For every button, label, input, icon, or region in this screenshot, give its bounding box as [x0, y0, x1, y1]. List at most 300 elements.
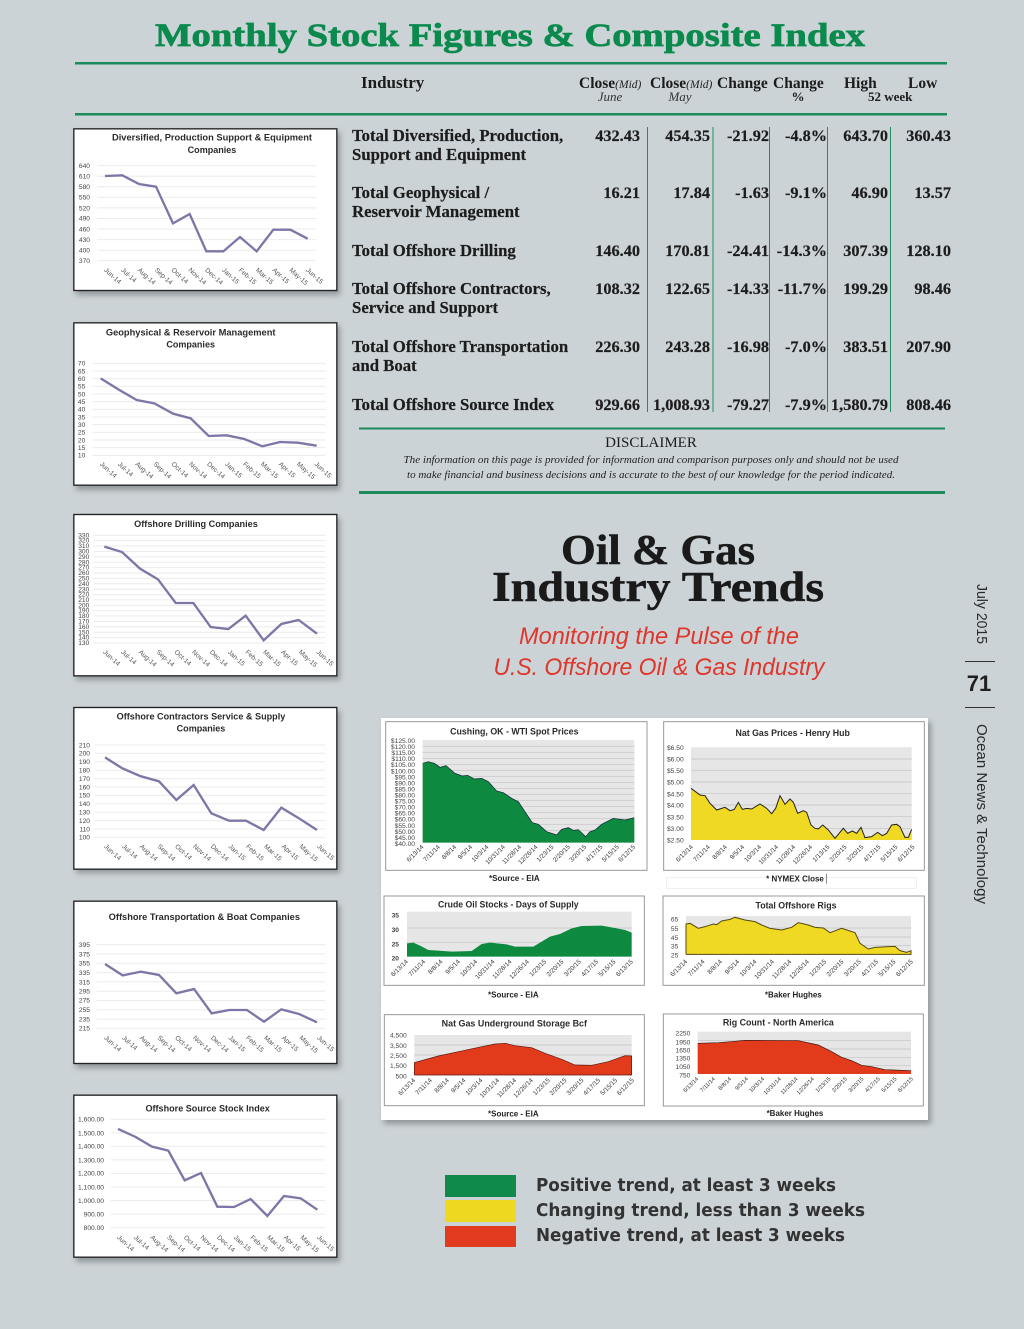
line chart: transportation and boat: 275	[79, 998, 90, 1005]
line chart: source stock index: Sep-14	[165, 1234, 186, 1254]
line chart: diversified: May-15	[288, 267, 309, 287]
line chart: offshore contractors	[74, 707, 337, 869]
line chart: diversified: 490	[79, 216, 90, 223]
line chart: offshore contractors: Companies	[177, 724, 225, 734]
area chart: WTI spot prices: 6/13/14	[406, 843, 426, 864]
line chart: offshore drilling: 190	[78, 608, 90, 615]
area chart: total offshore rigs: Total Offshore Rigs	[755, 900, 836, 910]
area chart: crude oil stocks: 7/11/14	[408, 958, 427, 978]
row: source index: 808.46	[906, 395, 951, 414]
area chart: WTI spot prices: $85.00	[395, 786, 415, 793]
area chart: WTI spot prices: $115.00	[391, 750, 415, 757]
area chart: WTI spot prices: 7/11/14	[422, 843, 442, 863]
row: offshore contractors	[352, 279, 951, 317]
subheading: U.S. Offshore Oil & Gas Industry	[494, 654, 826, 681]
area chart: total offshore rigs: 6/13/14	[669, 958, 689, 978]
area chart: Henry Hub gas prices: $5.00	[667, 780, 684, 787]
area chart: WTI spot prices: 9/5/14	[457, 843, 474, 861]
area chart: rig count: 8/8/14	[718, 1077, 733, 1092]
line chart: diversified: Companies	[188, 145, 236, 155]
area chart: total offshore rigs: 2/20/15	[826, 958, 846, 978]
line chart: source stock index: Nov-14	[199, 1234, 220, 1254]
line chart: offshore drilling: May-15	[297, 649, 318, 669]
area chart: rig count: 7/11/14	[699, 1077, 717, 1094]
line chart: offshore drilling: 250	[78, 575, 90, 582]
area chart: gas storage: 10/3/14	[465, 1077, 485, 1097]
line chart: geophysical	[74, 323, 337, 485]
legend item: positive trend	[445, 1175, 836, 1197]
line chart: geophysical: Sep-14	[152, 461, 173, 481]
area chart: Henry Hub gas prices: 10/3/14	[743, 843, 763, 864]
line chart: diversified: Nov-14	[187, 267, 208, 287]
line chart: offshore drilling: Sep-14	[155, 649, 176, 669]
line chart: geophysical: Companies	[166, 340, 215, 350]
line chart: offshore drilling: Offshore Drilling Companies	[134, 519, 258, 529]
line chart: geophysical: 50	[78, 391, 86, 398]
line chart: offshore contractors: 170	[79, 776, 90, 783]
line chart: diversified: 400	[79, 248, 90, 255]
table header: Close(Mid)	[579, 75, 642, 92]
row: diversified: 432.43	[595, 126, 640, 145]
line chart: diversified: 580	[79, 184, 90, 191]
line chart: transportation and boat: Apr-15	[280, 1035, 300, 1053]
area chart: WTI spot prices: $60.00	[395, 817, 415, 824]
area chart: WTI spot prices: $105.00	[391, 762, 415, 769]
area chart: crude oil stocks: 2/20/15	[546, 958, 566, 978]
line chart: offshore contractors: Dec-14	[209, 843, 230, 863]
line chart: offshore drilling: Jan-15	[226, 649, 246, 668]
line chart: offshore drilling: 220	[78, 592, 90, 599]
area chart: WTI spot prices: 1/23/15	[536, 843, 556, 864]
line chart: diversified: 520	[79, 205, 90, 212]
area chart: Henry Hub gas prices: 11/28/14	[775, 843, 797, 866]
line chart: offshore drilling: 260	[78, 570, 90, 577]
line chart: offshore contractors: Jul-14	[120, 843, 139, 861]
row: diversified: 454.35	[665, 126, 710, 145]
line chart: transportation and boat: Offshore Transportation & Boat Companies	[109, 912, 300, 922]
table header: Industry	[361, 73, 425, 92]
row: offshore contractors: 98.46	[914, 279, 951, 298]
line chart: diversified: Diversified, Production Support & Equipment	[112, 133, 312, 143]
sidebar: issue and page number: Ocean News & Technology	[973, 724, 989, 905]
row: offshore contractors: -11.7%	[778, 279, 827, 298]
line chart: source stock index: Offshore Source Stock Index	[145, 1104, 270, 1114]
line chart: geophysical: May-15	[295, 461, 316, 481]
subheading: Monitoring the Pulse of the	[519, 623, 799, 650]
line chart: transportation and boat: 215	[79, 1026, 90, 1033]
area chart: crude oil stocks: 30	[392, 927, 399, 934]
area chart: WTI spot prices: 8/8/14	[441, 843, 458, 861]
area chart: Henry Hub gas prices: $2.50	[667, 837, 684, 844]
line chart: diversified: 550	[79, 195, 90, 202]
line chart: offshore drilling: 320	[78, 538, 90, 545]
line chart: diversified: Jun-15	[304, 267, 324, 286]
area chart: WTI spot prices: 2/20/15	[552, 843, 572, 864]
area chart: Henry Hub gas prices: 10/31/14	[758, 843, 780, 866]
area chart: rig count: 1350	[676, 1055, 691, 1062]
line chart: geophysical: Jun-15	[313, 461, 333, 480]
line chart: transportation and boat: Sep-14	[156, 1035, 177, 1054]
line chart: offshore drilling: 160	[78, 624, 90, 631]
line chart: geophysical: Jun-14	[98, 461, 118, 480]
area chart: crude oil stocks: *Source - EIA	[488, 990, 539, 999]
area chart: rig count: 11/28/14	[780, 1077, 799, 1096]
line chart: geophysical: Oct-14	[170, 461, 189, 480]
area chart: total offshore rigs: 10/31/14	[753, 958, 776, 981]
area chart: gas storage: 3,500	[390, 1043, 407, 1050]
area chart: gas storage: 1/23/15	[532, 1077, 552, 1097]
line chart: offshore contractors: 200	[79, 751, 90, 758]
line chart: offshore contractors: Jun-14	[102, 843, 122, 862]
row: offshore drilling	[352, 241, 951, 260]
line chart: diversified: Oct-14	[170, 267, 189, 286]
area chart: rig count: 10/31/14	[763, 1077, 783, 1096]
disclaimer: DISCLAIMER	[605, 435, 697, 451]
line chart: transportation and boat: 315	[79, 979, 90, 986]
area chart: Henry Hub gas prices: 7/11/14	[692, 843, 712, 863]
line chart: offshore contractors: 120	[79, 818, 90, 825]
shadows behind line chart cards	[76, 132, 931, 1262]
row: offshore drilling: -24.41	[727, 241, 769, 260]
line chart: offshore contractors: Mar-15	[262, 843, 283, 863]
sidebar: issue and page number: 71	[967, 671, 991, 696]
line chart: source stock index: Feb-15	[249, 1234, 269, 1254]
area chart: crude oil stocks: 4/17/15	[580, 958, 600, 978]
area chart: gas storage: 8/8/14	[433, 1077, 451, 1095]
area chart: WTI spot prices: $70.00	[395, 805, 415, 812]
area chart: crude oil stocks: 6/13/14	[390, 958, 410, 978]
line chart: source stock index: 1,500.00	[78, 1130, 104, 1137]
row: offshore drilling: Total Offshore Drilling	[352, 241, 516, 260]
area chart: gas storage: 4,500	[390, 1033, 407, 1040]
table header: June	[598, 89, 622, 104]
line chart: diversified: Feb-15	[237, 267, 258, 286]
area chart: Henry Hub gas prices: $6.00	[667, 757, 684, 764]
area chart: total offshore rigs: 65	[671, 917, 679, 924]
area chart: Henry Hub gas prices: 9/5/14	[729, 843, 746, 861]
line chart: geophysical: 30	[78, 422, 86, 429]
area chart: crude oil stocks: 9/5/14	[444, 958, 462, 976]
row: offshore contractors: 199.29	[843, 279, 888, 298]
area chart: Henry Hub gas prices: 6/13/14	[675, 843, 695, 864]
area chart: crude oil stocks: 1/23/15	[528, 958, 548, 978]
area chart: WTI spot prices: $100.00	[391, 768, 415, 775]
area chart: WTI spot prices: 11/28/14	[501, 843, 523, 866]
line chart: offshore contractors: Aug-14	[138, 843, 159, 863]
area chart: WTI spot prices: 6/12/15	[617, 843, 637, 864]
area chart: rig count	[663, 1014, 923, 1118]
row: offshore contractors: Total Offshore Contractors,	[352, 279, 551, 298]
line chart: transportation and boat: Jun-15	[315, 1035, 335, 1054]
area chart: total offshore rigs: 11/28/14	[771, 958, 793, 981]
area chart: crude oil stocks: 12/26/14	[508, 958, 531, 981]
line chart: transportation and boat: 235	[79, 1016, 90, 1023]
title: Monthly Stock Figures & Composite Index	[155, 18, 866, 54]
line chart: diversified: Dec-14	[203, 267, 224, 287]
area chart: WTI spot prices: $75.00	[395, 799, 415, 806]
line chart: geophysical: 10	[78, 453, 86, 460]
row: offshore contractors: -14.33	[727, 279, 769, 298]
row: geophysical: Reservoir Management	[352, 202, 520, 221]
area chart: WTI spot prices: $40.00	[395, 841, 415, 848]
line chart: geophysical: 65	[78, 368, 86, 375]
line chart: source stock index: 1,300.00	[78, 1157, 104, 1164]
area chart: total offshore rigs: 4/17/15	[860, 958, 880, 978]
row: source index: -7.9%	[785, 395, 827, 414]
line chart: offshore drilling: Oct-14	[173, 649, 192, 668]
area chart: Henry Hub gas prices	[664, 722, 924, 888]
line chart: offshore drilling: 300	[78, 549, 90, 556]
area chart: rig count: 2/20/15	[831, 1077, 849, 1094]
row: geophysical: 17.84	[673, 183, 710, 202]
line chart: offshore contractors: 100	[79, 835, 90, 842]
line chart: source stock index: 900.00	[84, 1211, 104, 1218]
row: source index: -79.27	[727, 395, 769, 414]
area chart: crude oil stocks: 6/13/15	[615, 958, 635, 978]
area chart: Henry Hub gas prices: 12/26/14	[792, 843, 814, 866]
area chart: total offshore rigs: 6/12/15	[895, 958, 915, 978]
area chart: gas storage: 2/20/15	[549, 1077, 569, 1097]
line chart: geophysical: 25	[78, 430, 86, 437]
area chart: rig count: 1050	[676, 1064, 691, 1071]
line chart: offshore contractors: Apr-15	[280, 843, 300, 862]
line chart: source stock index: Jul-14	[132, 1234, 150, 1252]
line chart: diversified: 640	[79, 163, 90, 170]
line chart: offshore contractors: Feb-15	[244, 843, 265, 863]
line chart: geophysical: 70	[78, 361, 86, 368]
table header	[361, 73, 938, 104]
table header: Change	[717, 75, 768, 92]
area chart: WTI spot prices: $110.00	[391, 756, 415, 763]
line chart: transportation and boat: Oct-14	[173, 1035, 193, 1053]
table header: May	[667, 89, 692, 104]
area chart: total offshore rigs: 35	[671, 943, 679, 950]
heading: oil and gas industry trends	[492, 528, 824, 611]
line chart: offshore contractors: 180	[79, 768, 90, 775]
area chart: WTI spot prices: 4/17/15	[585, 843, 605, 864]
area chart: rig count: 10/3/14	[748, 1077, 766, 1094]
table header: 52 week	[868, 89, 913, 104]
row: transportation and boat	[352, 337, 951, 375]
line chart: offshore contractors: Sep-14	[156, 843, 177, 863]
row: geophysical: 13.57	[914, 183, 951, 202]
line chart: offshore drilling	[74, 514, 337, 676]
area chart: gas storage	[384, 1015, 644, 1119]
line chart: diversified: Jul-14	[119, 267, 138, 284]
legend item: positive trend: Positive trend, at least 3 weeks	[536, 1176, 836, 1196]
area chart: Henry Hub gas prices: 1/13/15	[812, 843, 832, 864]
line chart: offshore drilling: Nov-14	[190, 649, 211, 669]
line chart: geophysical: Feb-15	[241, 461, 262, 480]
row: diversified: Total Diversified, Production,	[352, 126, 563, 145]
subheading	[494, 623, 826, 681]
line chart: source stock index: Dec-14	[215, 1234, 236, 1254]
area chart: WTI spot prices: $120.00	[391, 744, 415, 751]
area chart: gas storage: 10/31/14	[479, 1077, 501, 1100]
line chart: geophysical: 20	[78, 437, 86, 444]
line chart: diversified: 370	[79, 258, 90, 265]
area chart: WTI spot prices: $90.00	[395, 780, 415, 787]
heading: oil and gas industry trends: Industry Trends	[492, 565, 824, 611]
row: offshore contractors: 122.65	[665, 279, 710, 298]
line chart: source stock index: Apr-15	[282, 1234, 302, 1253]
line chart: source stock index: Jun-15	[315, 1234, 335, 1253]
line chart: offshore contractors: Jun-15	[315, 843, 335, 862]
row: source index	[352, 395, 951, 414]
line chart: source stock index: 1,400.00	[78, 1144, 104, 1151]
line chart: geophysical: Jul-14	[116, 461, 134, 478]
area chart: Henry Hub gas prices: Nat Gas Prices - Henry Hub	[735, 728, 850, 738]
area chart: WTI spot prices: 12/26/14	[517, 843, 540, 866]
table: monthly stock figures	[352, 126, 951, 414]
line chart: offshore contractors: 150	[79, 793, 90, 800]
legend	[445, 1175, 865, 1247]
row: diversified: -21.92	[727, 126, 769, 145]
area chart: WTI spot prices: $125.00	[391, 738, 415, 745]
row: diversified	[352, 126, 951, 164]
line chart: transportation and boat: May-15	[298, 1035, 319, 1055]
line chart: transportation and boat: Jul-14	[120, 1035, 139, 1052]
area chart: rig count: 1650	[676, 1048, 691, 1055]
row: transportation and boat: 226.30	[595, 337, 640, 356]
area chart: rig count: 3/20/15	[848, 1077, 865, 1094]
table header: %	[792, 89, 804, 104]
legend item: changing trend: Changing trend, less than 3 weeks	[536, 1201, 865, 1221]
line chart: transportation and boat: 375	[79, 951, 90, 958]
line chart: offshore contractors: Nov-14	[191, 843, 212, 863]
line chart: geophysical: 40	[78, 407, 86, 414]
area chart: crude oil stocks: Crude Oil Stocks - Days of Supply	[438, 900, 579, 910]
line chart: transportation and boat: Nov-14	[191, 1035, 212, 1054]
line chart: offshore drilling: 290	[78, 554, 90, 561]
line chart: transportation and boat: 335	[79, 970, 90, 977]
heading: oil and gas industry trends: Oil & Gas	[561, 528, 755, 574]
line chart: offshore contractors: Oct-14	[173, 843, 193, 862]
row: diversified: -4.8%	[785, 126, 827, 145]
panel: industry trend charts	[381, 718, 928, 1120]
line chart: offshore contractors: Offshore Contractors Service & Supply	[117, 711, 285, 721]
area chart: total offshore rigs: 1/23/15	[808, 958, 828, 978]
line chart: diversified: 610	[79, 174, 90, 181]
disclaimer	[404, 435, 899, 481]
area chart: Henry Hub gas prices: $6.50	[667, 745, 684, 752]
line chart: offshore drilling: Aug-14	[137, 649, 158, 669]
line chart: geophysical: Aug-14	[134, 461, 155, 481]
area chart: rig count: 9/5/14	[734, 1077, 750, 1092]
row: geophysical	[352, 183, 951, 221]
line chart: diversified: 460	[79, 226, 90, 233]
line chart: offshore contractors: Jan-15	[227, 843, 247, 862]
line chart: geophysical: Geophysical & Reservoir Management	[106, 327, 275, 337]
area chart: rig count: 6/13/14	[682, 1077, 700, 1094]
line chart: source stock index: Oct-14	[182, 1234, 202, 1253]
area chart: gas storage: 12/26/14	[512, 1077, 535, 1100]
row: source index: 1,580.79	[831, 395, 888, 414]
area chart: WTI spot prices: $55.00	[395, 823, 415, 830]
line chart: offshore contractors: 140	[79, 801, 90, 808]
area chart: crude oil stocks	[384, 896, 644, 999]
line chart: offshore contractors: 110	[79, 826, 90, 833]
line chart: transportation and boat: 255	[79, 1007, 90, 1014]
legend item: negative trend: Negative trend, at least 3 weeks	[536, 1226, 845, 1246]
area chart: WTI spot prices: Cushing, OK - WTI Spot Prices	[450, 726, 578, 736]
area chart: crude oil stocks: 10/3/14	[459, 958, 479, 978]
line chart: diversified: Jun-14	[102, 267, 122, 286]
line chart: transportation and boat: Feb-15	[244, 1035, 265, 1054]
area chart: gas storage: 7/11/14	[414, 1077, 434, 1097]
line chart: source stock index: 1,100.00	[78, 1184, 104, 1191]
row: transportation and boat: and Boat	[352, 356, 417, 375]
row: offshore drilling: 307.39	[843, 241, 888, 260]
line chart: geophysical: Jan-15	[223, 461, 243, 480]
area chart: Henry Hub gas prices: 2/20/15	[829, 843, 849, 864]
area chart: Henry Hub gas prices: 5/15/15	[880, 843, 900, 864]
line chart: source stock index	[74, 1095, 337, 1257]
row: geophysical: Total Geophysical /	[352, 183, 489, 202]
row: offshore contractors: 108.32	[595, 279, 640, 298]
disclaimer: to make financial and business decisions and is accurate to the best of our knowledge for the period indicated.	[407, 469, 895, 481]
line chart: source stock index: 800.00	[84, 1225, 104, 1232]
area chart: Henry Hub gas prices: 3/20/15	[846, 843, 866, 864]
area chart: WTI spot prices: *Source - EIA	[489, 874, 540, 883]
area chart: rig count: 5/15/15	[881, 1077, 898, 1094]
line chart: diversified: 430	[79, 237, 90, 244]
area chart: total offshore rigs: 8/8/14	[706, 958, 724, 976]
line chart: offshore drilling: Jun-15	[315, 649, 335, 668]
area chart: crude oil stocks: 35	[392, 913, 399, 920]
area chart: crude oil stocks: 25	[392, 941, 399, 948]
area chart: gas storage: 6/12/15	[616, 1077, 636, 1097]
row: transportation and boat: Total Offshore Transportation	[352, 337, 569, 356]
area chart: Henry Hub gas prices: $3.50	[667, 814, 684, 821]
line chart: offshore drilling: 270	[78, 565, 90, 572]
area chart: Henry Hub gas prices: * NYMEX Close	[766, 875, 824, 884]
row: transportation and boat: 383.51	[843, 337, 888, 356]
line chart: offshore drilling: 140	[78, 635, 90, 642]
sidebar: issue and page number: July 2015	[973, 584, 989, 644]
area chart: WTI spot prices: $80.00	[395, 793, 415, 800]
area chart: rig count: Rig Count - North America	[723, 1017, 835, 1027]
area chart: rig count: 4/17/15	[864, 1077, 882, 1094]
line chart: transportation and boat: 395	[79, 942, 90, 949]
area chart: Henry Hub gas prices: 4/17/15	[863, 843, 883, 864]
row: offshore contractors: Service and Support	[352, 298, 499, 317]
line chart: offshore contractors: 160	[79, 784, 90, 791]
area chart: crude oil stocks: 20	[392, 955, 399, 962]
area chart: gas storage: Nat Gas Underground Storage Bcf	[442, 1019, 588, 1029]
row: diversified: 360.43	[906, 126, 951, 145]
area chart: crude oil stocks: 11/28/14	[491, 958, 514, 981]
area chart: Henry Hub gas prices: $4.00	[667, 803, 684, 810]
row: offshore drilling: 128.10	[906, 241, 951, 260]
line chart: diversified: Mar-15	[254, 267, 275, 286]
area chart: rig count: *Baker Hughes	[767, 1109, 824, 1118]
area chart: crude oil stocks: 8/8/14	[427, 958, 445, 976]
area chart: gas storage: 5/15/15	[599, 1077, 619, 1097]
line chart: transportation and boat: Mar-15	[262, 1035, 283, 1054]
area chart: WTI spot prices: 3/20/15	[568, 843, 588, 864]
row: transportation and boat: 243.28	[665, 337, 710, 356]
line chart: offshore drilling: 310	[78, 543, 90, 550]
table header: High	[844, 75, 877, 92]
line chart: geophysical: 55	[78, 384, 86, 391]
legend item: changing trend	[445, 1200, 865, 1222]
line chart: transportation and boat: Jun-14	[102, 1035, 122, 1054]
row: source index: 1,008.93	[653, 395, 710, 414]
line chart: transportation and boat: 295	[79, 989, 90, 996]
area chart: gas storage: *Source - EIA	[488, 1110, 539, 1119]
area chart: gas storage: 11/28/14	[496, 1077, 518, 1099]
